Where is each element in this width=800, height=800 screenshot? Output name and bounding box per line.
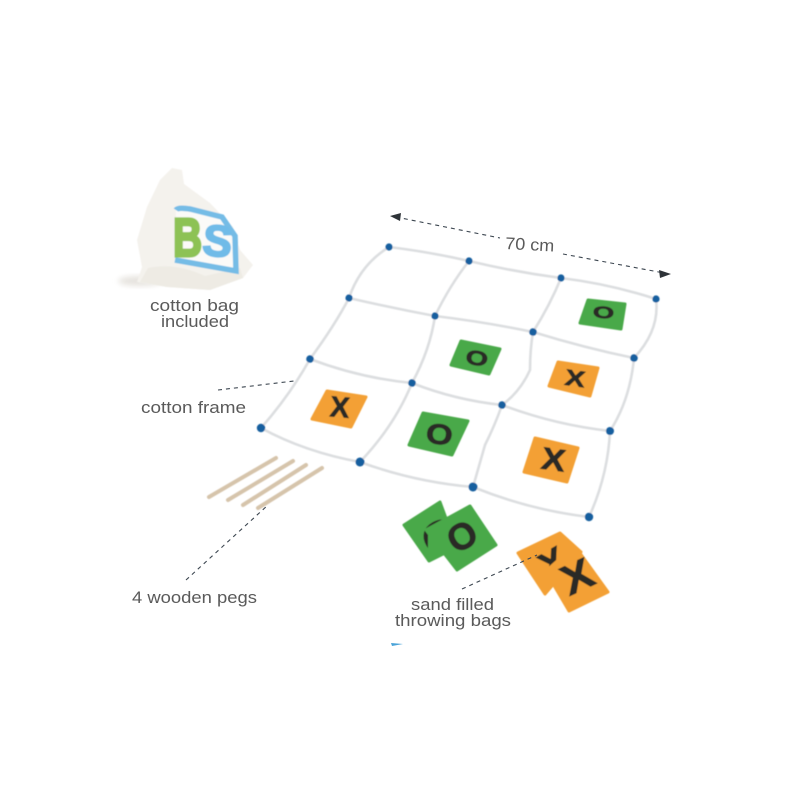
logo letters: S xyxy=(200,216,235,267)
icon: four wooden pegs xyxy=(209,458,322,508)
icon: cotton bag with BS logo xyxy=(118,168,253,290)
icons: blue corner beads xyxy=(257,243,660,521)
bag: green O bottom xyxy=(409,413,468,455)
icon: loose orange X bags: X xyxy=(532,539,576,588)
icon: loose orange X bags: X xyxy=(554,549,602,605)
icon: loose orange X bags xyxy=(518,533,608,611)
bag: green O top right: O xyxy=(592,302,615,323)
bag: orange X left xyxy=(312,391,366,427)
text: 70 cm: 70 cm xyxy=(505,234,555,256)
blue mark fragment xyxy=(391,643,403,646)
bag: green O top right xyxy=(580,300,625,329)
text: sand filled throwing bags xyxy=(395,595,511,630)
bag: orange X centre right xyxy=(549,362,598,396)
bag: green O centre: O xyxy=(464,346,490,371)
bag: green O centre xyxy=(451,341,500,374)
arrow: 70 cm dimension xyxy=(390,213,671,278)
icon: loose green O bags: O xyxy=(440,511,485,561)
callout line: wooden pegs xyxy=(186,505,268,580)
bag: orange X bottom right xyxy=(524,438,578,482)
bag: orange X centre right: X xyxy=(563,364,587,392)
icon: loose green O bags xyxy=(404,502,496,571)
bag: green O bottom: O xyxy=(424,416,455,452)
logo letters: B xyxy=(173,208,202,268)
callout line: cotton frame xyxy=(218,381,294,390)
text: sand filled throwing bags: throwing bags xyxy=(395,611,511,630)
text: sand filled throwing bags: sand filled xyxy=(411,595,494,614)
text: cotton frame: cotton frame xyxy=(141,398,246,417)
logo letters xyxy=(173,208,235,268)
text: cotton bag included: included xyxy=(161,312,229,331)
icon: blue logo frame xyxy=(175,208,236,271)
text: cotton bag included: cotton bag xyxy=(150,296,239,315)
bag: orange X bottom right: X xyxy=(539,442,568,479)
text: 4 wooden pegs: 4 wooden pegs xyxy=(132,588,257,607)
text: cotton bag included xyxy=(150,296,239,331)
callout line: throwing bags xyxy=(462,555,537,589)
frame: cotton string grid xyxy=(257,243,660,521)
bag: orange X left: X xyxy=(329,391,351,425)
icon: loose green O bags: O xyxy=(412,506,471,571)
